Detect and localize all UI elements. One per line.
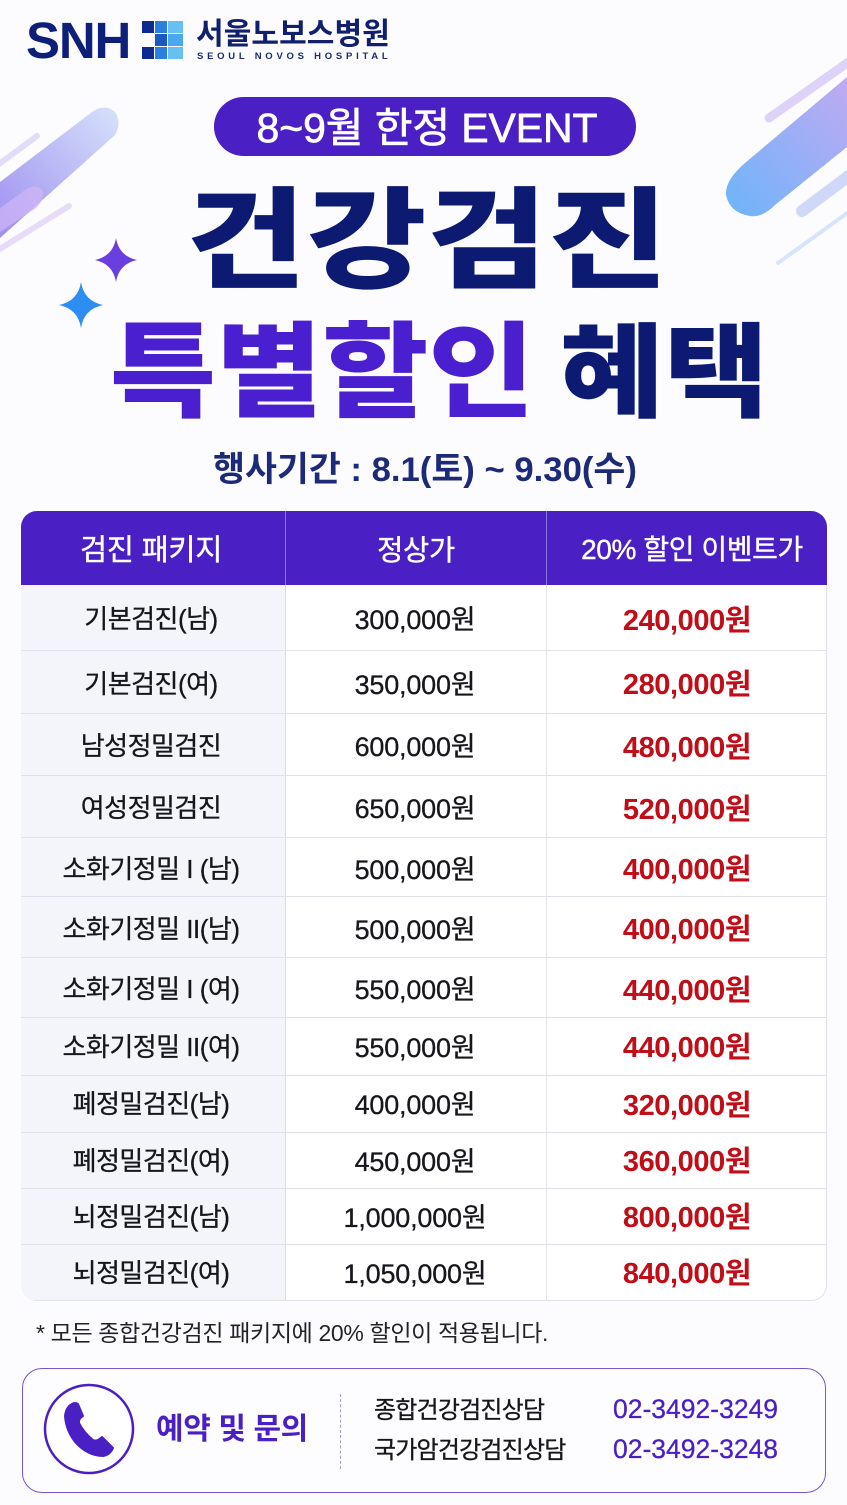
row	[21, 1189, 827, 1245]
row	[21, 838, 827, 897]
title line 1: 건강검진	[186, 180, 669, 303]
contact heading: 예약 및 문의	[156, 1413, 308, 1446]
row: 소화기정밀 I (남)	[62, 854, 240, 884]
row: 440,000원	[623, 1032, 751, 1064]
contact panel	[22, 1368, 826, 1493]
row: 기본검진(남)	[84, 604, 218, 634]
row	[21, 651, 827, 714]
row	[21, 585, 827, 651]
title line 2: 특별할인	[110, 316, 535, 431]
row	[21, 776, 827, 838]
row	[21, 1133, 827, 1189]
row: 800,000원	[623, 1202, 751, 1234]
row: 뇌정밀검진(여)	[73, 1258, 229, 1288]
row: 300,000원	[355, 605, 475, 635]
footnote: * 모든 종합건강검진 패키지에 20% 할인이 적용됩니다.	[36, 1320, 548, 1346]
row: 550,000원	[355, 975, 475, 1005]
row: 기본검진(여)	[84, 668, 218, 698]
icon: blue sparkle	[59, 282, 103, 328]
row: 450,000원	[355, 1146, 475, 1176]
row: 1,050,000원	[344, 1258, 486, 1288]
icon: phone	[44, 1384, 134, 1474]
row: 남성정밀검진	[81, 731, 221, 761]
title line 2 suffix: 혜택	[560, 316, 768, 431]
row	[21, 897, 827, 958]
row: 350,000원	[355, 670, 475, 700]
table header: 검진 패키지	[80, 534, 222, 567]
contact line 1 label: 종합건강검진상담	[374, 1397, 544, 1424]
contact line 2 number: 02-3492-3248	[613, 1434, 778, 1464]
row: 650,000원	[355, 794, 475, 824]
logo english name: SEOUL NOVOS HOSPITAL	[197, 51, 391, 62]
logo mark: blue squares	[142, 21, 183, 59]
row: 여성정밀검진	[81, 793, 221, 823]
event badge	[214, 97, 636, 156]
row: 280,000원	[623, 669, 751, 701]
row: 440,000원	[623, 974, 751, 1006]
row: 840,000원	[623, 1258, 751, 1290]
background decorations	[0, 58, 847, 265]
row: 550,000원	[355, 1032, 475, 1062]
row: 400,000원	[355, 1090, 475, 1120]
row: 320,000원	[623, 1090, 751, 1122]
table header	[21, 511, 827, 585]
row: 폐정밀검진(남)	[73, 1089, 229, 1119]
logo	[26, 12, 391, 69]
row: 360,000원	[623, 1146, 751, 1178]
row: 폐정밀검진(여)	[73, 1146, 229, 1176]
row	[21, 714, 827, 776]
row	[21, 958, 827, 1018]
table header: 정상가	[377, 534, 455, 566]
row: 1,000,000원	[344, 1202, 486, 1232]
event badge: 8~9월 한정 EVENT	[257, 105, 597, 151]
row: 소화기정밀 I (여)	[62, 974, 240, 1004]
logo korean name: 서울노보스병원	[196, 18, 390, 51]
row: 소화기정밀 II(여)	[62, 1032, 240, 1062]
logo mark: SNH: SNH	[26, 12, 130, 69]
row	[21, 1076, 827, 1133]
row: 480,000원	[623, 732, 751, 764]
row	[21, 1245, 827, 1301]
row: 400,000원	[623, 854, 751, 886]
divider	[340, 1394, 341, 1469]
contact line 1 number: 02-3492-3249	[613, 1394, 778, 1424]
contact line 2 label: 국가암건강검진상담	[374, 1437, 566, 1464]
row: 500,000원	[355, 854, 475, 884]
row: 240,000원	[623, 604, 751, 636]
row: 600,000원	[355, 732, 475, 762]
row	[21, 1018, 827, 1076]
table header: 20% 할인 이벤트가	[581, 534, 803, 565]
icon: purple sparkle	[95, 238, 137, 282]
row: 500,000원	[355, 914, 475, 944]
event period: 행사기간 : 8.1(토) ~ 9.30(수)	[213, 451, 637, 489]
row: 뇌정밀검진(남)	[73, 1202, 229, 1232]
price table	[21, 511, 827, 1301]
row: 520,000원	[623, 794, 751, 826]
row: 400,000원	[623, 914, 751, 946]
row: 소화기정밀 II(남)	[62, 914, 240, 944]
